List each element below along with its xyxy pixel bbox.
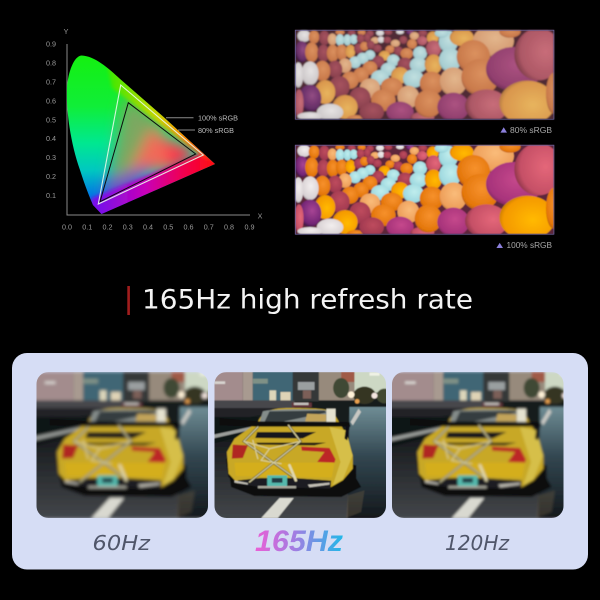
panel: refresh rate comparison <box>12 353 598 570</box>
y axis labels: 0.3 <box>46 153 56 162</box>
sRGB labels: 80% sRGB <box>198 126 234 135</box>
image: 120Hz car <box>392 372 564 518</box>
image border <box>295 145 554 234</box>
heading accent bar <box>127 286 130 315</box>
y axis labels: 0.9 <box>46 40 56 48</box>
image: 165Hz car <box>214 372 386 518</box>
label: 120Hz: 120Hz <box>445 531 510 555</box>
caption 80% sRGB: 80% sRGB <box>510 126 553 135</box>
x axis labels: X <box>258 212 263 220</box>
x axis labels: 0.1 <box>82 222 92 232</box>
x axis labels: 0.6 <box>184 222 194 232</box>
x axis labels: 0.9 <box>244 222 254 232</box>
image border <box>295 30 554 119</box>
sRGB labels <box>198 114 238 135</box>
y axis labels: 0.4 <box>46 134 56 143</box>
x axis labels: 0.0 <box>62 222 72 232</box>
y axis labels: 0.7 <box>46 78 56 86</box>
y axis labels: 0.2 <box>46 172 56 181</box>
panel: colour gamut chart <box>46 27 263 232</box>
chart axes <box>67 44 250 215</box>
panel: 100% sRGB sample image <box>293 140 562 250</box>
y axis labels: Y <box>64 27 69 36</box>
colour gamut shape <box>66 56 215 214</box>
x axis labels: 0.8 <box>224 222 234 232</box>
macaron image 80% <box>293 25 562 125</box>
y axis labels: 0.5 <box>46 116 56 124</box>
y axis labels: 0.6 <box>46 96 56 106</box>
x axis labels <box>62 212 263 232</box>
80% sRGB triangle <box>100 103 196 202</box>
panel background <box>12 353 588 570</box>
y axis labels: 0.1 <box>46 191 56 200</box>
x axis labels: 0.3 <box>123 222 133 232</box>
x axis labels: 0.5 <box>163 222 173 232</box>
sRGB labels: 100% sRGB <box>198 114 238 122</box>
label: 60Hz: 60Hz <box>92 531 151 555</box>
x axis labels: 0.7 <box>204 222 214 232</box>
100% sRGB triangle <box>98 85 203 204</box>
macaron image 100% <box>293 140 562 240</box>
heading text: 165Hz high refresh rate <box>142 284 473 316</box>
panel: 80% sRGB sample image <box>293 25 562 135</box>
label: 165Hz: 165Hz <box>255 525 343 558</box>
image: 60Hz car <box>36 372 208 518</box>
x axis labels: 0.4 <box>143 222 153 232</box>
leader lines <box>166 118 195 130</box>
y axis labels <box>46 27 69 200</box>
caption 100% sRGB: 100% sRGB <box>506 241 553 250</box>
x axis labels: 0.2 <box>102 222 112 232</box>
y axis labels: 0.8 <box>46 58 56 68</box>
